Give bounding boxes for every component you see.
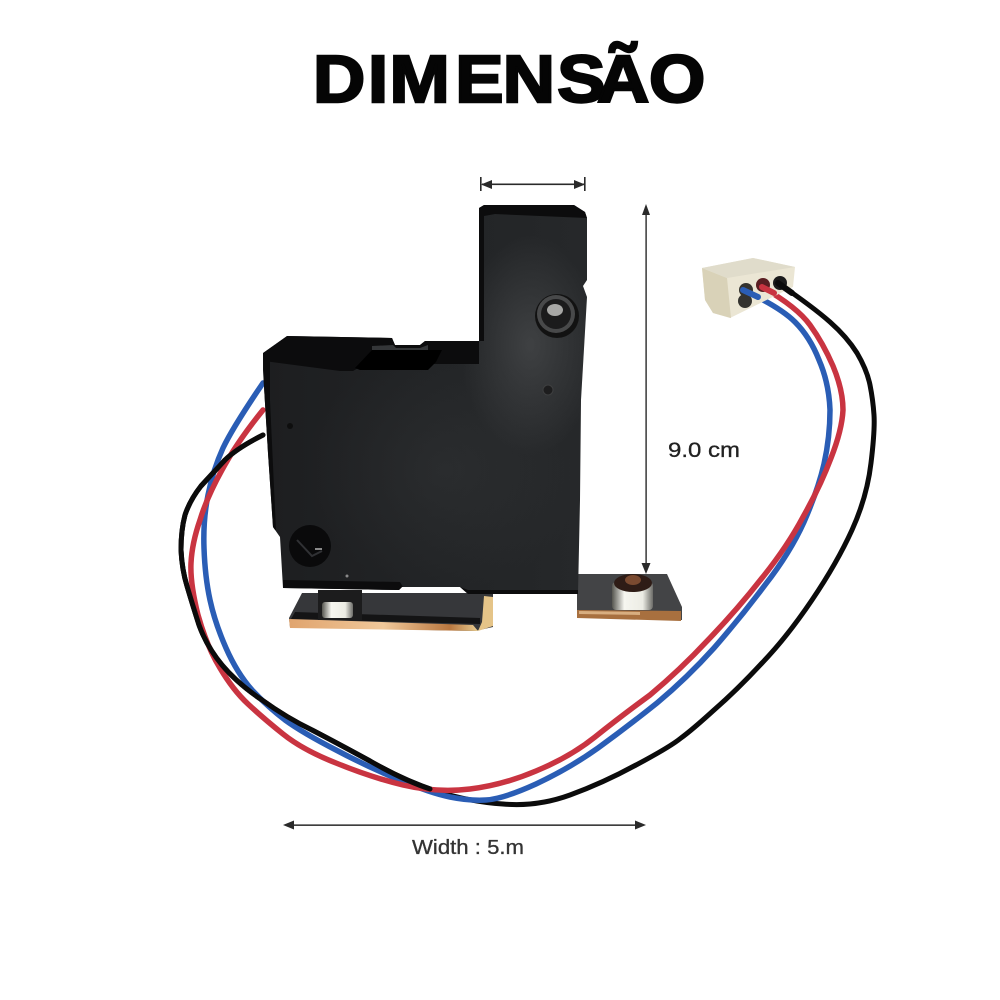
upper screw bbox=[535, 294, 579, 338]
wires: black, blue and red leads bbox=[181, 283, 874, 805]
relay body bbox=[263, 205, 600, 596]
left terminal plate bbox=[289, 590, 493, 631]
small body hole bbox=[543, 385, 553, 395]
top dimension arrow bbox=[480, 177, 586, 191]
width dimension arrow bbox=[283, 820, 646, 830]
height dimension arrow bbox=[642, 204, 650, 574]
small body marks bbox=[287, 423, 348, 578]
lower screw bbox=[289, 525, 331, 567]
width label: Width : 5.m bbox=[412, 837, 524, 859]
infographic canvas bbox=[178, 40, 877, 854]
height label: 9.0 cm bbox=[668, 439, 740, 462]
title: DIMENSÃO bbox=[313, 41, 705, 116]
connector bbox=[702, 258, 795, 318]
right terminal plate bbox=[577, 574, 682, 621]
